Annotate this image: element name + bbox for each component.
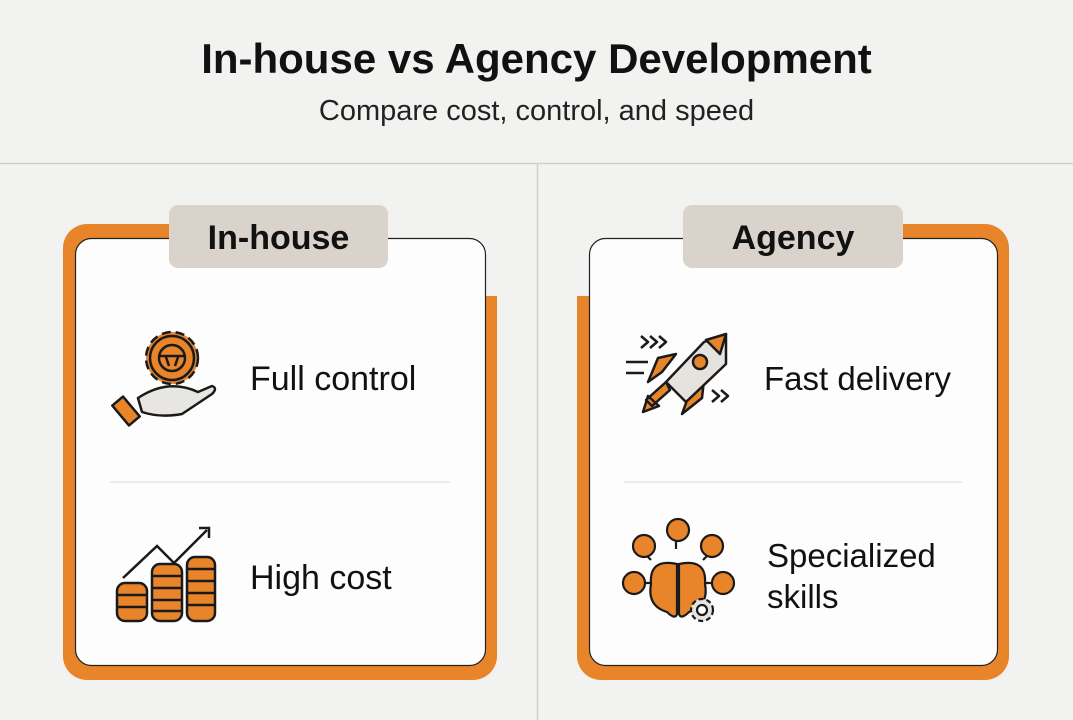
tab: in-house	[169, 205, 388, 268]
tab: agency	[683, 205, 903, 268]
text: fast delivery: Fast delivery	[764, 360, 952, 397]
subtitle: Compare cost, control, and speed	[319, 95, 754, 127]
text: high cost: High cost	[250, 559, 392, 597]
icon: gear in hand	[112, 332, 215, 425]
icon: coins growth	[117, 528, 215, 621]
panel: agency	[573, 205, 1009, 680]
icon: rocket	[626, 334, 728, 414]
title: In-house vs Agency Development	[201, 35, 872, 82]
panel: agency: skills	[767, 578, 838, 615]
tab: in-house: In-house	[208, 219, 349, 257]
panel: in-house	[63, 205, 501, 680]
text: specialized skills: Specialized	[767, 537, 936, 574]
icon: brain skills	[623, 519, 734, 621]
tab: agency: Agency	[732, 219, 854, 257]
text: full control: Full control	[250, 360, 416, 398]
